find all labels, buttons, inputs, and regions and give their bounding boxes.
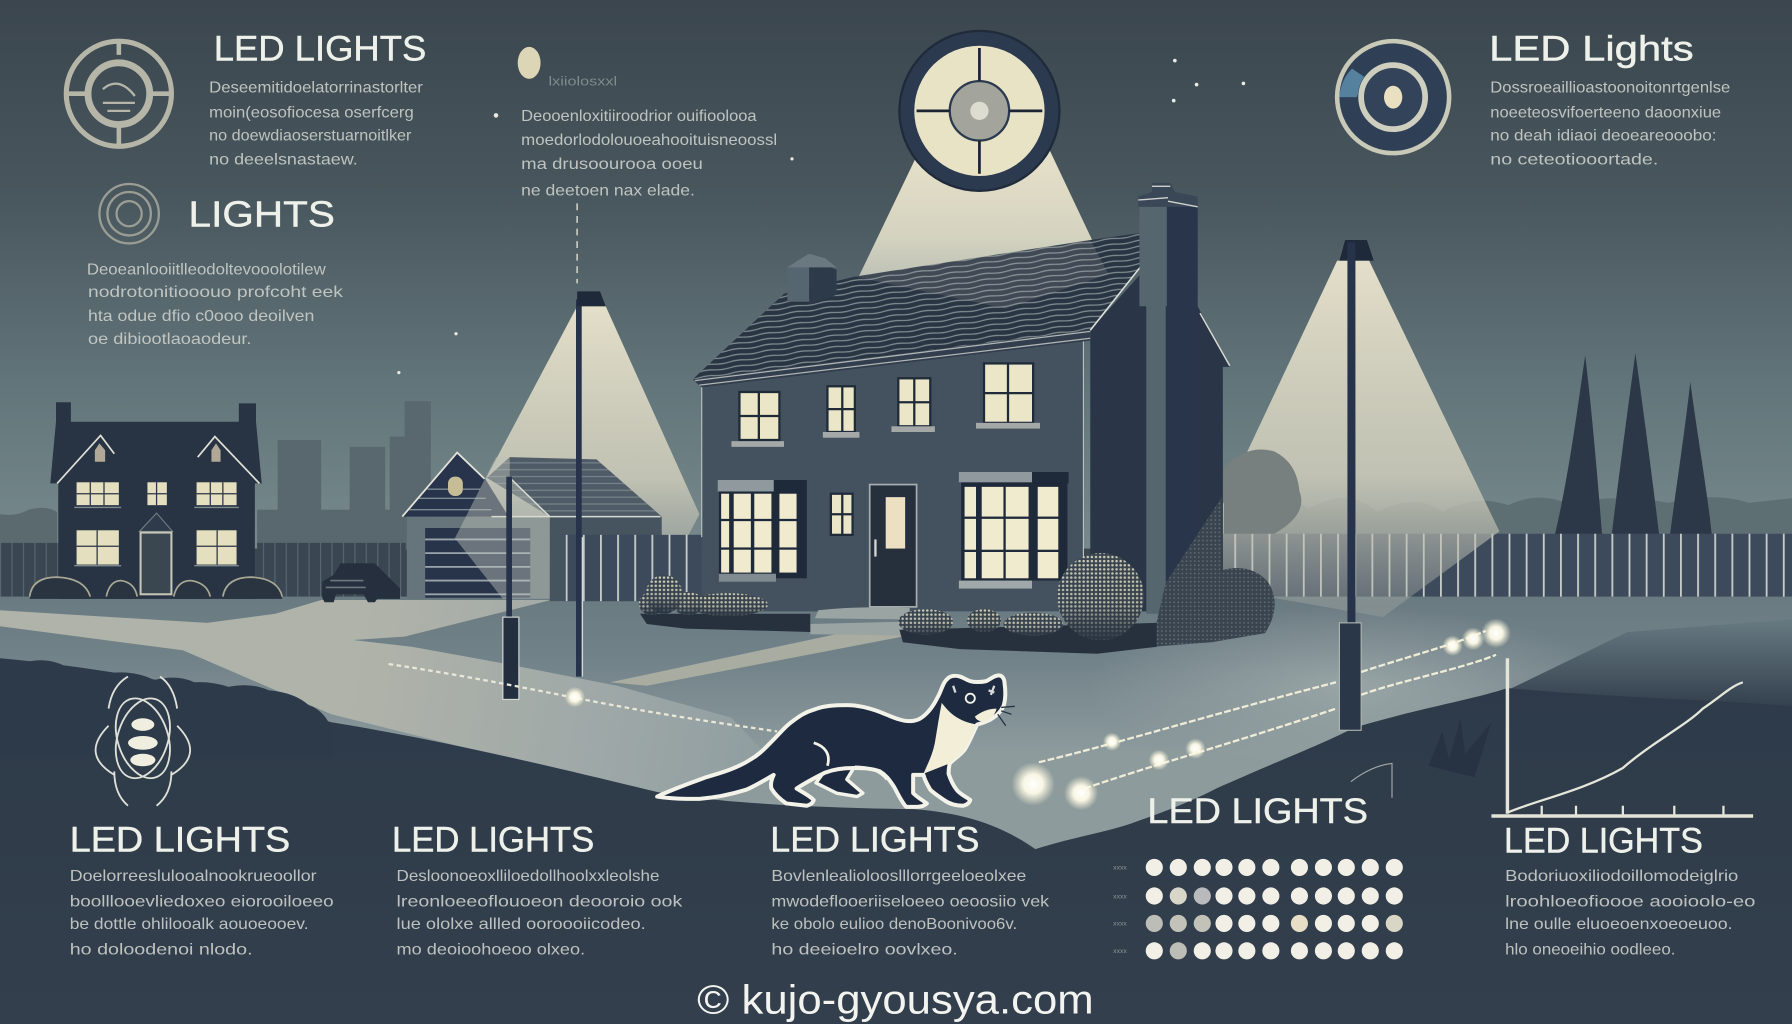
- right fence: [1223, 534, 1792, 632]
- steps: [810, 607, 910, 635]
- heading: panel 1: LED LIGHTS: [70, 819, 290, 859]
- lit lawn patch: [1086, 606, 1611, 766]
- text block: top left: [209, 80, 424, 169]
- stoat face: [953, 686, 1015, 726]
- LED glow points: [565, 618, 1511, 810]
- house front wall: [702, 338, 1083, 611]
- chart axes: [1491, 658, 1753, 816]
- garage: [402, 453, 702, 601]
- roof light wash: [855, 240, 1109, 309]
- text block: left: Deoeanlooiitlleodoltevooolotilew: [87, 261, 326, 278]
- small chimney: [787, 254, 837, 304]
- text block: top left: no deeelsnastaew.: [209, 152, 358, 169]
- LED strip lights right: [1039, 631, 1496, 789]
- text block: top left: Deseemitidoelatorrinastorlter: [209, 80, 424, 97]
- heading: lights: LIGHTS: [189, 193, 335, 234]
- back wall: [257, 543, 406, 599]
- window sills: [731, 423, 1040, 447]
- door: [139, 513, 173, 531]
- heading: panel 2: LED LIGHTS: [392, 819, 594, 859]
- distant tree line: [1223, 497, 1792, 549]
- dot row labels: xxxx: [1113, 948, 1127, 955]
- ground lawn: [0, 597, 1792, 1024]
- text block: panel 1: [70, 868, 334, 958]
- garage door: [425, 528, 530, 598]
- fern decoration: [1429, 718, 1491, 777]
- text block: panel 2: [397, 868, 684, 958]
- text block: top right: noeeteosvifoerteeno daoonxiue: [1490, 105, 1721, 122]
- text block: top middle: ma drusoourooa ooeu: [521, 156, 703, 173]
- text block: top right: no ceteotiooortade.: [1490, 152, 1658, 169]
- text block: panel 1: be dottle ohlilooalk aouoeooev.: [70, 916, 309, 933]
- top round lamp: [899, 31, 1059, 191]
- text block: top middle: Deooenloxitiiroodrior ouifioolooa: [521, 108, 757, 125]
- heading: panel 3: LED LIGHTS: [770, 819, 979, 859]
- faded heading: lxiiolosxxl: [549, 75, 617, 89]
- distant city skyline: [257, 401, 431, 554]
- eave band: [693, 330, 1090, 387]
- left short lamp post: [503, 477, 519, 699]
- gable lines: [57, 435, 259, 483]
- stoat body: [657, 675, 1005, 807]
- text block: top middle: ne deetoen nax elade.: [521, 182, 695, 199]
- lighter corner strip: [1146, 299, 1167, 614]
- stoat thigh line: [814, 743, 887, 779]
- chart curve: [1507, 682, 1743, 813]
- house right side wall: [1090, 266, 1230, 611]
- icon: target top right: [1337, 41, 1449, 153]
- text block: panel 5: Bodoriuoxiliodoillomodeiglrio: [1505, 868, 1738, 885]
- driveway path: [610, 630, 909, 686]
- text block: left: oe dibiootlaoaodeur.: [88, 331, 251, 348]
- dot row labels: xxxx: [1113, 865, 1127, 872]
- right bush base: [899, 623, 1157, 654]
- right tall lamp post: [1339, 240, 1374, 730]
- chart panel: [1491, 658, 1753, 816]
- road light band: [0, 600, 777, 794]
- icon: lamp bulb: [518, 47, 541, 79]
- dark foreground: [0, 658, 1792, 1024]
- copyright: © kujo-gyousya.com: [697, 977, 1094, 1023]
- text block: top right: no deah idiaoi deoeareooobo:: [1490, 128, 1717, 145]
- left tree line: [0, 508, 57, 544]
- windows: [77, 482, 237, 565]
- garage gable: [402, 453, 509, 517]
- sky background: [0, 0, 1792, 549]
- text block: panel 2: mo deoioohoeoo olxeo.: [397, 941, 585, 958]
- text block: top left: moin(eosofiocesa oserfcerg: [209, 105, 414, 122]
- background house left: [30, 402, 282, 599]
- text block: panel 3: ho deeioelro oovlxeo.: [771, 941, 958, 958]
- dot row labels: xxxx: [1113, 921, 1127, 928]
- stoat: [657, 675, 1015, 807]
- left fence: [0, 543, 59, 598]
- heading: top left: LED LIGHTS: [214, 29, 426, 69]
- dot matrix chart: [1113, 859, 1403, 959]
- text block: panel 1: Doelorreeslulooalnookrueoollor: [70, 868, 317, 885]
- right bush tufts: [898, 553, 1144, 640]
- icon: target top left: [66, 41, 171, 146]
- text block: panel 3: ke obolo eulioo denoBoonivoo6v.: [771, 916, 1017, 933]
- text block: panel 1: boolllooevliedoxeo eiorooiloeeo: [70, 893, 334, 910]
- text block: left: nodrotonitiooouo profcoht eek: [88, 284, 344, 301]
- text block: top right: [1490, 80, 1730, 169]
- bay window right: [959, 472, 1069, 589]
- text block: panel 2: Desloonoeoxlliloedollhoolxxleolshe: [397, 868, 660, 885]
- text block: top left: no doewdiaoserstuarnoitlker: [209, 128, 412, 145]
- text block: panel 3: mwodeflooeriiseloeeo oeoosiio vek: [771, 893, 1050, 910]
- tall chimney: [1138, 183, 1198, 615]
- text block: panel 5: hlo oneoeihio oodleeo.: [1505, 941, 1675, 958]
- small twig: [1351, 763, 1392, 798]
- text block: top middle: [521, 108, 777, 199]
- left bush base: [640, 614, 810, 632]
- icon: bug: [96, 677, 190, 806]
- grey bush behind cone: [1224, 449, 1301, 534]
- text block: left: hta odue dfio c0ooo deoilven: [88, 308, 314, 325]
- text block: top middle: moedorlodolouoeahooituisneoossl: [521, 132, 777, 149]
- mid fence: [550, 535, 703, 602]
- front door: [870, 485, 917, 607]
- heading: top right: LED Lights: [1489, 29, 1694, 69]
- left bush tufts: [639, 575, 768, 616]
- garage walls: [407, 517, 550, 599]
- heading: panel 5: LED LIGHTS: [1504, 821, 1703, 861]
- lower right lawn: [1507, 619, 1792, 714]
- stoat chest: [923, 703, 977, 774]
- main house: [693, 183, 1230, 635]
- upper windows: [739, 363, 1033, 535]
- bay window left: [718, 480, 807, 582]
- dot row labels: [1113, 865, 1127, 955]
- right dark hedge slope: [1151, 497, 1275, 647]
- text block: panel 5: lroohloeofioooe aooioolo-eo: [1505, 893, 1756, 910]
- chart ticks: [1542, 806, 1723, 816]
- text block: panel 5: [1505, 868, 1756, 958]
- stoat far hind leg: [816, 766, 863, 797]
- text block: panel 1: ho doloodenoi nlodo.: [70, 941, 253, 958]
- icon: small circle: [99, 184, 159, 243]
- text block: panel 3: Bovlenlealiolooslllorrgeeloeolxee: [771, 868, 1026, 885]
- gable line: [1200, 313, 1230, 366]
- text block: panel 5: lne oulle eluoeoenxoeoeuoo.: [1505, 916, 1733, 933]
- text block: left: [87, 261, 344, 348]
- LED strip lights left: [389, 664, 777, 731]
- right lamp light cone: [1189, 261, 1499, 617]
- text block: panel 2: lue ololxe allled ooroooiicodeo.: [397, 916, 646, 933]
- small stars: [397, 59, 1245, 374]
- left tall lamp post: [576, 203, 606, 677]
- left lamp light cone: [455, 306, 699, 594]
- text block: top right: Dossroeaillioastoonoitonrtgenlse: [1490, 80, 1730, 97]
- roof: [693, 233, 1151, 379]
- lit overlay: [455, 457, 550, 599]
- cypress trees: [1554, 353, 1712, 537]
- bushes: [30, 577, 282, 599]
- bushes by house: [639, 497, 1275, 654]
- garage roof: [487, 457, 662, 517]
- parked car: [322, 563, 400, 602]
- hedge left foreground: [0, 660, 333, 757]
- heading: panel 4: LED LIGHTS: [1147, 791, 1368, 831]
- text block: panel 3: [771, 868, 1050, 958]
- dot row labels: xxxx: [1113, 893, 1127, 900]
- top round lamp light cone: [857, 118, 1095, 286]
- text block: panel 2: lreonloeeoflouoeon deooroio ook: [397, 893, 684, 910]
